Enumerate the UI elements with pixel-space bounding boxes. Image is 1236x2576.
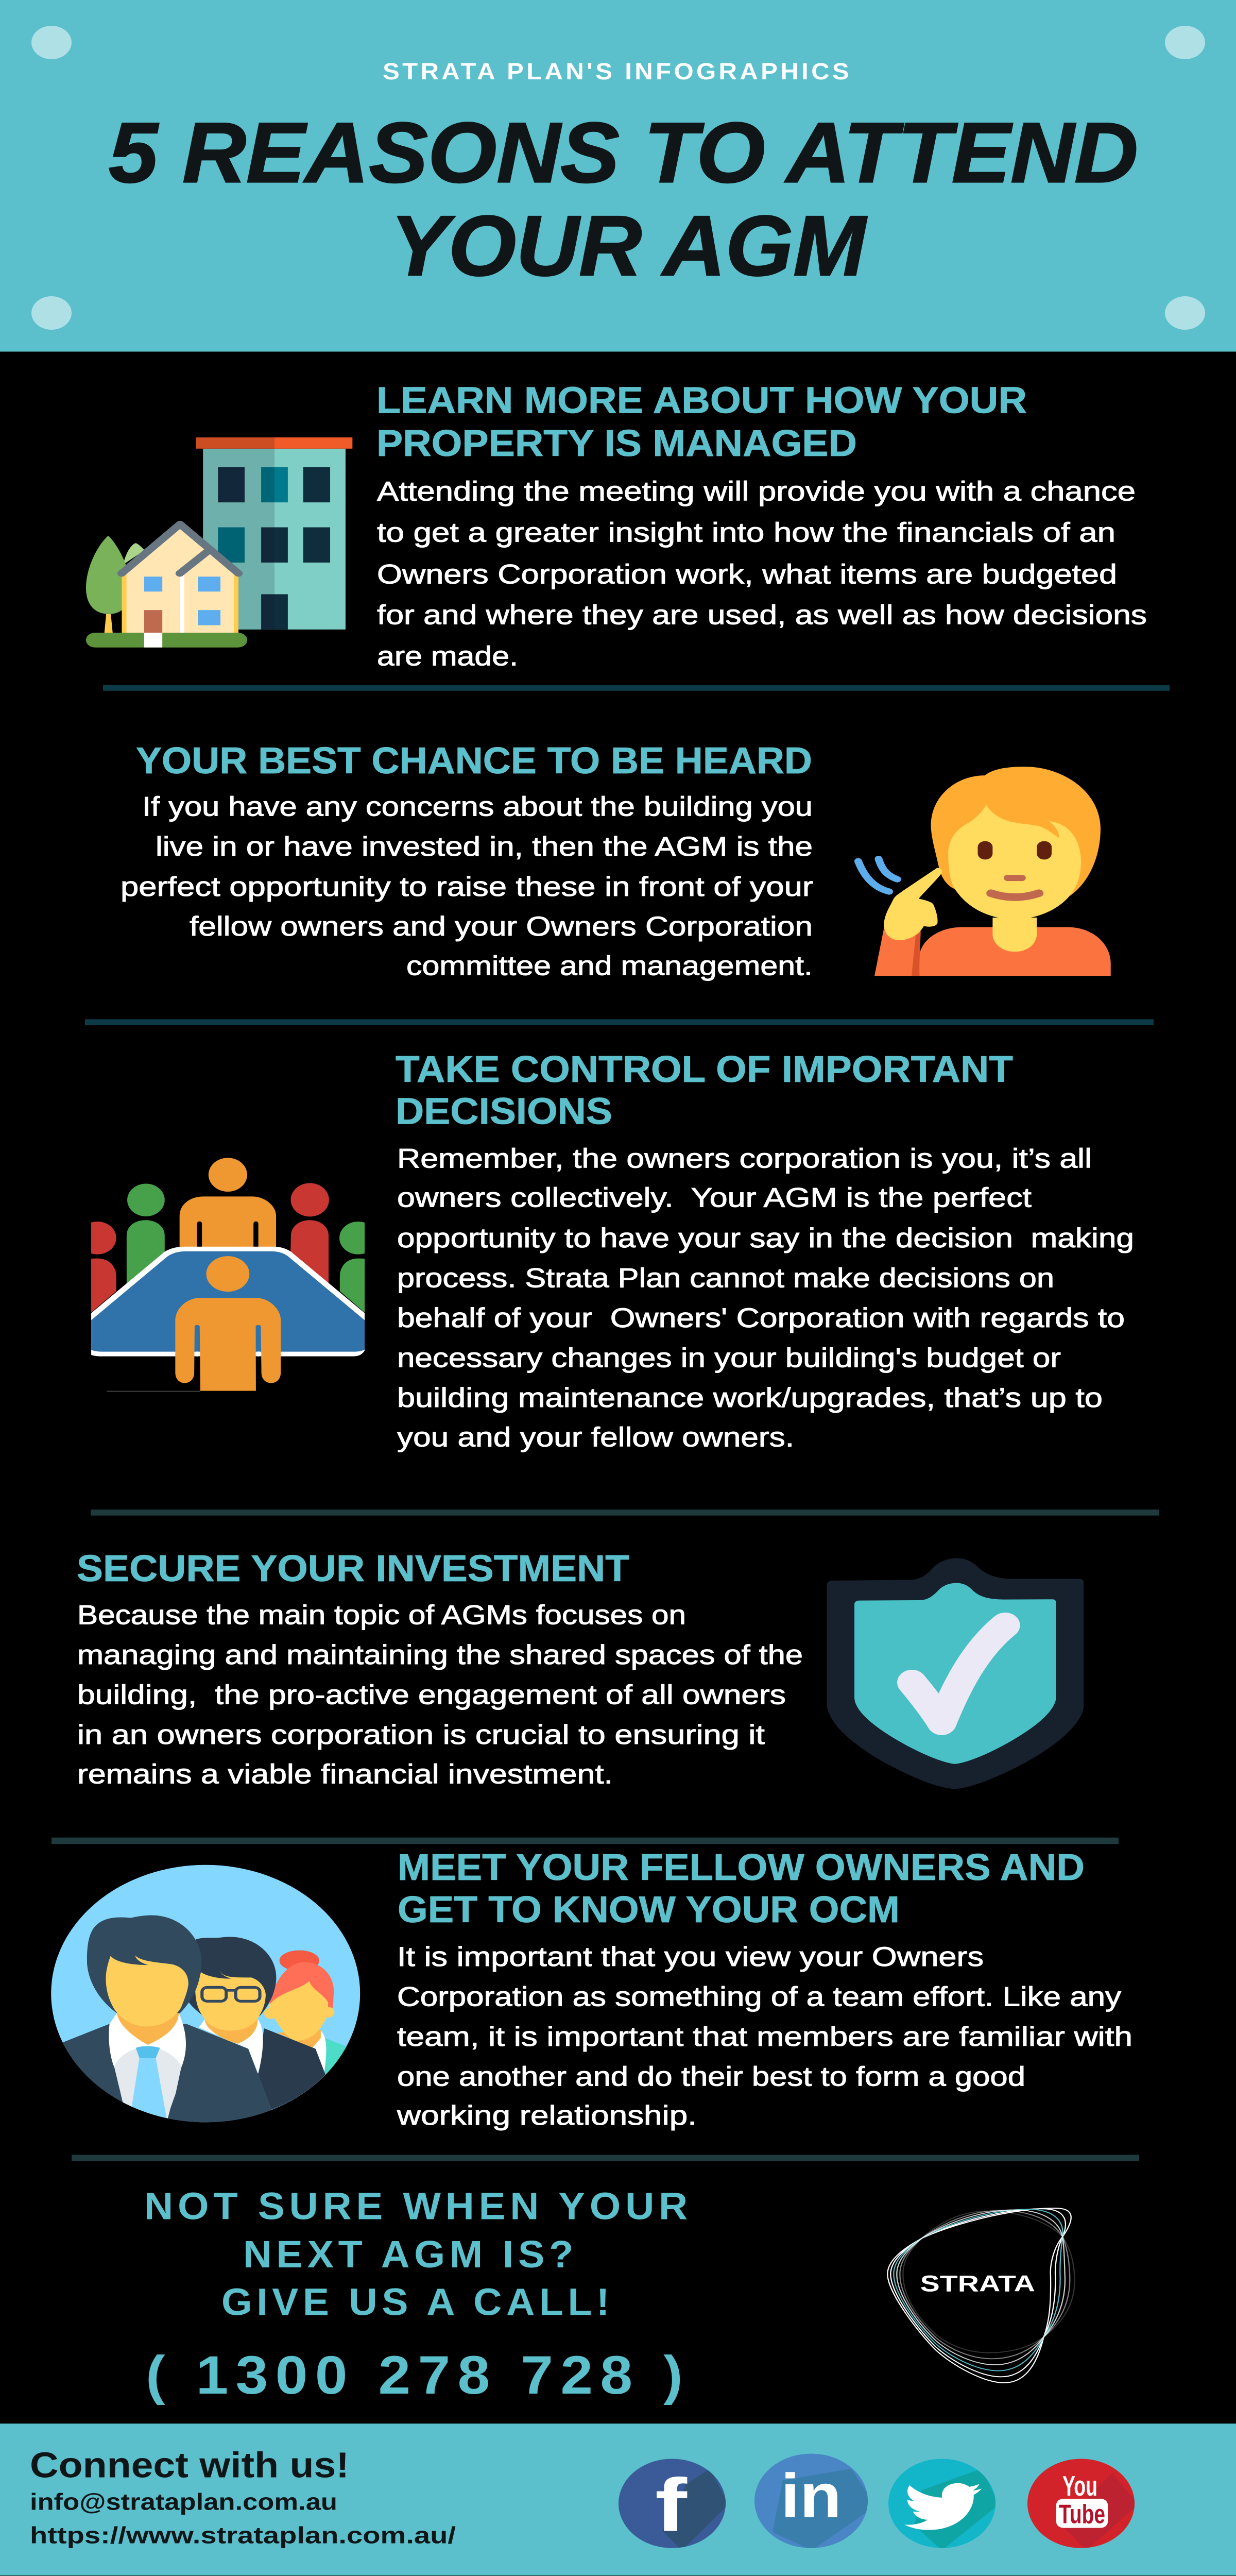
text block xyxy=(77,1600,803,1789)
heading: LEARN MORE ABOUT HOW YOUR xyxy=(376,379,1027,421)
callout: call to action xyxy=(144,2185,692,2405)
icon: facebook: f xyxy=(655,2463,687,2547)
heading: GET TO KNOW YOUR OCM xyxy=(398,1889,900,1930)
heading: YOUR BEST CHANCE TO BE HEARD xyxy=(136,740,812,781)
icon: twitter xyxy=(886,2456,999,2550)
heading: DECISIONS xyxy=(396,1090,612,1132)
text block: are made. xyxy=(377,641,518,671)
icon: youtube: Tube xyxy=(1059,2499,1105,2529)
heading: PROPERTY IS MANAGED xyxy=(376,422,857,464)
callout: call to action: NOT SURE WHEN YOUR xyxy=(144,2185,692,2228)
text block: fellow owners and your Owners Corporation xyxy=(190,912,813,942)
heading xyxy=(376,379,1027,464)
text block: managing and maintaining the shared spaces of the xyxy=(77,1640,803,1670)
text block: in an owners corporation is crucial to ensuring it xyxy=(77,1720,765,1750)
heading: TAKE CONTROL OF IMPORTANT xyxy=(396,1048,1013,1090)
icon: meeting table with people xyxy=(79,1158,377,1392)
text block: team, it is important that members are familiar with xyxy=(397,2022,1132,2052)
icon: facebook xyxy=(618,2456,729,2550)
contact details: https://www.strataplan.com.au/ xyxy=(30,2522,456,2549)
text block: If you have any concerns about the building you xyxy=(142,792,813,822)
text block: building, the pro-active engagement of all owners xyxy=(77,1680,786,1710)
phone number: ( 1300 278 728 ) xyxy=(146,2345,690,2405)
text block: owners collectively. Your AGM is the perfect xyxy=(397,1183,1032,1213)
icon: linkedin: in xyxy=(781,2461,842,2531)
eyebrow text: STRATA PLAN'S INFOGRAPHICS xyxy=(383,58,852,84)
icon: shield with check mark xyxy=(827,1558,1084,1789)
text block xyxy=(397,1942,1132,2131)
text block: Attending the meeting will provide you with a chance xyxy=(377,477,1136,506)
text block xyxy=(397,1144,1134,1452)
panel: reason 1 property managed xyxy=(86,379,1147,671)
text block xyxy=(377,477,1147,671)
panel: reason 4 secure your investment xyxy=(77,1548,1084,1789)
text block: building maintenance work/upgrades, that’s up to xyxy=(397,1383,1103,1413)
heading xyxy=(396,1048,1013,1132)
icon: Strata logo: STRATA xyxy=(920,2272,1035,2296)
text block: committee and management. xyxy=(406,951,813,981)
icon: house and apartment building xyxy=(86,437,352,648)
heading: MEET YOUR FELLOW OWNERS AND xyxy=(398,1846,1085,1888)
text block: perfect opportunity to raise these in front of your xyxy=(121,872,813,902)
heading xyxy=(398,1846,1085,1930)
text block: process. Strata Plan cannot make decisions on xyxy=(397,1263,1054,1293)
panel: footer contact bar xyxy=(0,2424,1236,2575)
title: YOUR AGM xyxy=(390,198,867,293)
text block: Corporation as something of a team effort. Like any xyxy=(397,1982,1121,2012)
panel: reason 2 best chance to be heard xyxy=(121,740,1111,981)
contact details xyxy=(30,2489,456,2549)
text block: Owners Corporation work, what items are budgeted xyxy=(377,560,1117,589)
text block: you and your fellow owners. xyxy=(397,1422,794,1452)
icon: youtube: You xyxy=(1062,2470,1097,2502)
text block: working relationship. xyxy=(397,2101,697,2131)
text block: remains a viable financial investment. xyxy=(77,1759,613,1789)
text block: necessary changes in your building's budget or xyxy=(397,1343,1061,1373)
decorative corner dots xyxy=(31,26,1205,330)
heading: SECURE YOUR INVESTMENT xyxy=(77,1548,629,1589)
panel: reason 3 take control xyxy=(79,1048,1134,1452)
callout: call to action: NEXT AGM IS? xyxy=(243,2233,578,2276)
text block: Because the main topic of AGMs focuses on xyxy=(77,1600,686,1630)
icon: youtube xyxy=(1025,2456,1138,2550)
text block: behalf of your Owners' Corporation with regards to xyxy=(397,1303,1125,1333)
callout: call to action: GIVE US A CALL! xyxy=(221,2281,614,2324)
contact details: info@strataplan.com.au xyxy=(30,2489,337,2515)
text block: It is important that you view your Owners xyxy=(397,1942,984,1972)
icon: person pointing to ear xyxy=(858,767,1111,976)
text block: one another and do their best to form a good xyxy=(397,2062,1025,2092)
title xyxy=(109,105,1138,293)
text block: for and where they are used, as well as how decisions xyxy=(377,600,1147,630)
text block xyxy=(121,792,813,981)
text block: Remember, the owners corporation is you, it’s all xyxy=(397,1144,1092,1174)
text block: to get a greater insight into how the financials of an xyxy=(377,518,1115,548)
icon: linkedin xyxy=(752,2451,876,2550)
heading: connect with us: Connect with us! xyxy=(30,2445,349,2485)
text block: opportunity to have your say in the decision making xyxy=(397,1224,1134,1253)
panel: reason 5 meet your fellow owners xyxy=(41,1846,1132,2140)
icon: three business people in circle xyxy=(51,1865,360,2123)
icon: Strata logo xyxy=(887,2208,1075,2383)
text block: live in or have invested in, then the AGM is the xyxy=(156,832,813,862)
panel: header banner xyxy=(0,0,1236,351)
